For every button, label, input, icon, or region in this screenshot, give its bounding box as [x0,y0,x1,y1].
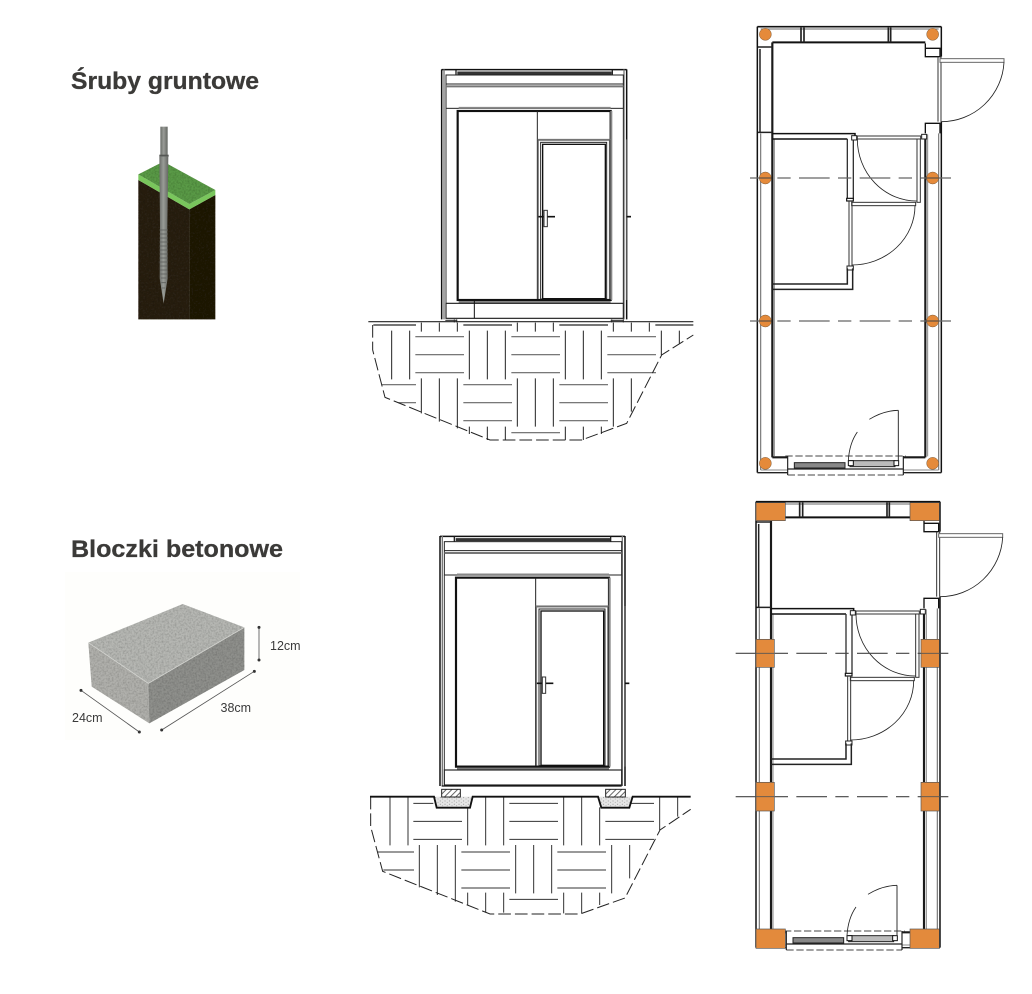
concrete block positions [756,503,939,948]
illustration: ground screw in soil [138,127,215,319]
soil hatching [373,323,693,440]
title: Bloczki betonowe: Bloczki betonowe [71,536,283,563]
soil hatching [371,797,691,914]
label: 24cm: 24cm [72,711,103,725]
title: Śruby gruntowe: Śruby gruntowe [71,67,259,95]
section lines [750,178,953,321]
label: 12cm: 12cm [270,639,301,653]
floor plan: concrete block layout [727,502,1003,950]
label: 38cm: 38cm [220,701,251,715]
floor plan: ground screw layout [750,27,1004,475]
block faces [88,604,244,723]
footings [370,789,691,808]
dimension lines [79,626,260,733]
screw positions [759,28,939,469]
elevation drawing: cabin on concrete blocks [370,536,691,914]
section lines [727,653,952,797]
illustration: concrete block with dimensions [65,572,301,740]
elevation drawing: cabin on ground screws [368,69,693,440]
